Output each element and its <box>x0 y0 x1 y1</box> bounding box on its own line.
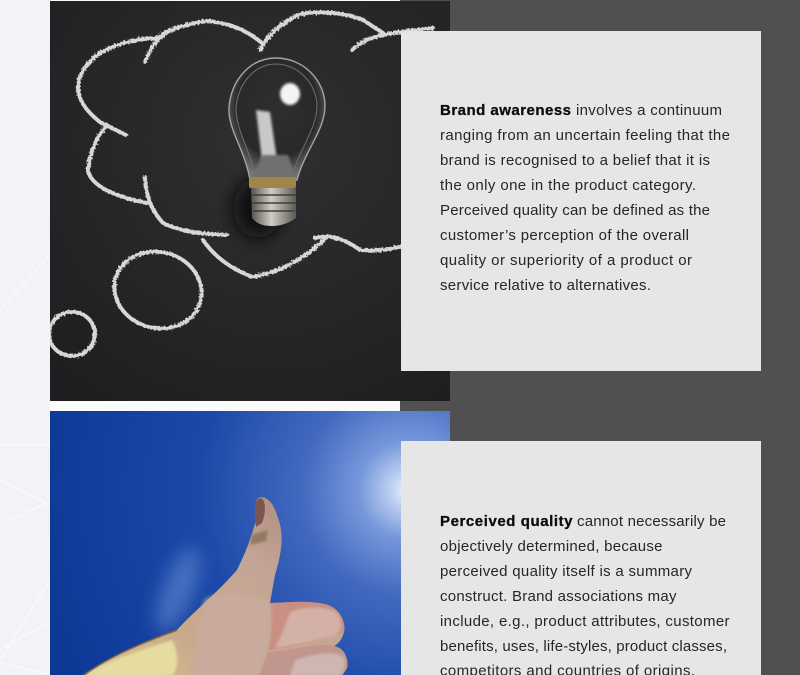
text block: perceived quality: perceived quality itself is a summary <box>440 563 692 580</box>
text block: brand awareness: Perceived quality can be defined as the <box>440 202 710 219</box>
image: thumbs up against blue sky <box>50 411 450 675</box>
light bulb <box>229 58 325 238</box>
text block: brand awareness: quality or superiority of a product or <box>440 252 692 269</box>
text block: perceived quality: construct. Brand associations may <box>440 588 677 605</box>
text block: perceived quality: objectively determined, because <box>440 538 662 555</box>
text block: perceived quality: include, e.g., product attributes, customer <box>440 613 730 630</box>
text block: brand awareness: service relative to alternatives. <box>440 277 651 294</box>
image: light bulb on chalkboard with thought cloud <box>49 1 450 401</box>
thin clouds <box>149 544 206 635</box>
text block: perceived quality: benefits, uses, life-styles, product classes, <box>440 638 727 655</box>
text block: brand awareness: the only one in the product category. <box>440 177 696 194</box>
text block: brand awareness: Brand awareness <box>440 102 571 119</box>
text block: perceived quality <box>440 513 730 675</box>
text block: brand awareness: brand is recognised to a belief that it is <box>440 152 710 169</box>
panel: perceived quality <box>401 441 761 675</box>
hand <box>83 497 347 675</box>
text block: brand awareness <box>440 102 730 294</box>
text block: brand awareness: ranging from an uncertain feeling that the <box>440 127 730 144</box>
text block: brand awareness: involves a continuum <box>576 102 722 119</box>
text block: perceived quality: Perceived quality <box>440 513 573 530</box>
chalk thought cloud and bubbles <box>49 12 433 356</box>
panel: brand awareness <box>401 31 761 371</box>
text block: brand awareness: customer’s perception of the overall <box>440 227 689 244</box>
text block: perceived quality: cannot necessarily be <box>577 513 726 530</box>
